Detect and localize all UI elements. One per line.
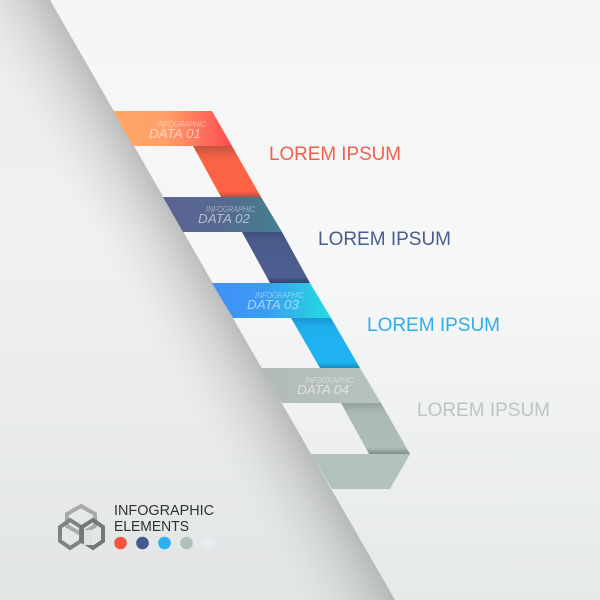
ribbon step 3: DATA 03 (247, 298, 299, 312)
ribbon step 1: INFOGRAPHIC (157, 120, 206, 129)
ribbon step 1: DATA 01 (149, 127, 201, 141)
logo title: INFOGRAPHIC (114, 503, 214, 519)
ribbon step 4: DATA 04 (297, 383, 349, 397)
color legend dots (114, 537, 215, 549)
ribbon step 2 (163, 197, 310, 283)
label: lorem ipsum gray: LOREM IPSUM (417, 399, 550, 421)
ribbon end fold (311, 454, 410, 489)
ribbon step 3 (212, 283, 360, 368)
label: lorem ipsum navy: LOREM IPSUM (318, 228, 451, 250)
label: lorem ipsum blue: LOREM IPSUM (367, 314, 500, 336)
ribbon step 2: INFOGRAPHIC (206, 205, 255, 214)
ribbon step 4 (261, 368, 410, 454)
ribbon step 2: DATA 02 (198, 212, 250, 226)
icon: interlocked hexagon logo (60, 506, 103, 548)
logo title (114, 503, 214, 535)
ribbon step 3: INFOGRAPHIC (255, 291, 304, 300)
ribbon step 1 (113, 111, 261, 197)
ribbon step 4: INFOGRAPHIC (305, 376, 354, 385)
logo title: ELEMENTS (114, 519, 189, 535)
label: lorem ipsum red: LOREM IPSUM (269, 143, 401, 165)
folded paper panel with shadow (0, 0, 395, 600)
